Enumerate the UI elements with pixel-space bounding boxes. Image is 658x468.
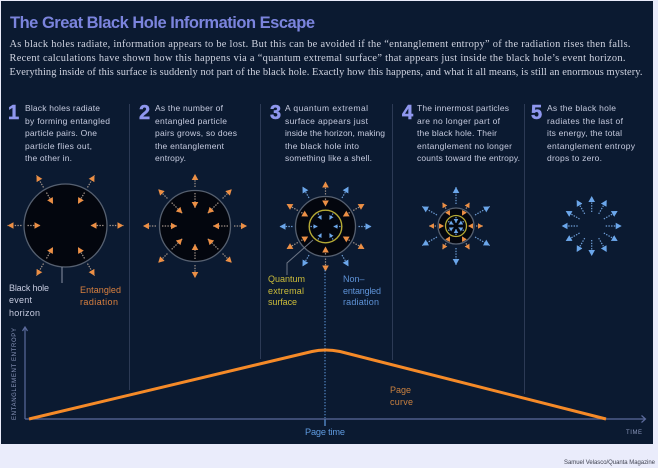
intro text <box>10 39 642 78</box>
step 2 <box>139 102 237 163</box>
step 1 <box>8 102 110 163</box>
step 1: Black holes radiate <box>25 103 100 113</box>
label: non-entangled radiation: radiation <box>343 297 379 307</box>
title: The Great Black Hole Information Escape <box>10 14 315 32</box>
label: quantum extremal surface: extremal <box>268 286 304 296</box>
label: quantum extremal surface <box>268 240 313 307</box>
step 5: drops to zero. <box>547 153 602 163</box>
step 4: The innermost particles <box>417 103 509 113</box>
black hole 1 <box>8 175 124 276</box>
label: black hole event horizon: event <box>9 295 32 305</box>
black hole 2 <box>143 174 247 278</box>
step 1: the other in. <box>25 153 72 163</box>
step 5: 5 <box>531 102 542 124</box>
step 4: entanglement no longer <box>417 141 512 151</box>
step 3: A quantum extremal <box>285 103 368 113</box>
black hole 4 <box>422 187 490 265</box>
step 5: radiates the last of <box>547 116 624 126</box>
label: quantum extremal surface: surface <box>268 297 297 307</box>
x axis label: TIME <box>626 430 642 436</box>
step 3: the black hole into <box>285 141 359 151</box>
step 4: 4 <box>402 102 414 124</box>
step 3: 3 <box>270 102 281 124</box>
step 3: inside the horizon, making <box>285 128 385 138</box>
step 5 <box>531 102 636 163</box>
label: non-entangled radiation: entangled <box>343 286 381 296</box>
label: page curve <box>390 385 413 407</box>
label: page curve: curve <box>390 397 413 407</box>
step 4: are no longer part of <box>417 116 501 126</box>
intro text: As black holes radiate, information appears to be lost. But this can be avoided if the “entanglement entropy” of the radiation rises then falls. <box>10 39 630 50</box>
label: entangled radiation: radiation <box>80 297 118 307</box>
step 2: pairs grows, so does <box>155 128 237 138</box>
step 2: As the number of <box>155 103 224 113</box>
radiation burst 5 <box>562 196 622 256</box>
label: entangled radiation: Entangled <box>80 285 121 295</box>
intro text: Everything inside of this surface is suddenly not part of the black hole. Exactly how this happens, and what it all means, is still an enormous mystery. <box>10 67 642 78</box>
label: quantum extremal surface: Quantum <box>268 274 305 284</box>
step 2: entropy. <box>155 153 186 163</box>
label: non-entangled radiation: Non– <box>343 274 365 284</box>
label: black hole event horizon: horizon <box>9 308 40 318</box>
step 4: the black hole. Their <box>417 128 497 138</box>
intro text: Recent calculations have shown how this happens via a “quantum extremal surface” that appears just inside the black hole’s event horizon. <box>10 53 626 64</box>
step 4 <box>402 102 520 163</box>
y axis label: ENTANGLEMENT ENTROPY <box>12 328 18 420</box>
label: black hole event horizon <box>9 267 62 318</box>
step 1: particle pairs. One <box>25 128 97 138</box>
step 2: entangled particle <box>155 116 227 126</box>
label: non-entangled radiation <box>343 274 381 307</box>
label: entangled radiation <box>80 285 121 307</box>
step 4: counts toward the entropy. <box>417 153 520 163</box>
axes <box>22 327 646 422</box>
step 5: entanglement entropy <box>547 141 636 151</box>
step 3: something like a shell. <box>285 153 372 163</box>
step 3 <box>270 102 385 163</box>
step 3: surface appears just <box>285 116 369 126</box>
column dividers <box>130 104 524 394</box>
black hole 3 with quantum extremal surface <box>280 182 372 272</box>
step 2: the entanglement <box>155 141 225 151</box>
step 2: 2 <box>139 102 150 124</box>
label: page curve: Page <box>390 385 411 395</box>
page curve line <box>29 350 606 419</box>
entropy chart <box>12 327 646 436</box>
step 5: As the black hole <box>547 103 616 113</box>
step 1: by forming entangled <box>25 116 110 126</box>
page time marker: Page time <box>305 427 345 437</box>
credit: Samuel Velasco/Quanta Magazine <box>564 460 656 466</box>
label: black hole event horizon: Black hole <box>9 283 49 293</box>
step 1: 1 <box>8 102 19 124</box>
step 1: particle flies out, <box>25 141 92 151</box>
step 5: its energy, the total <box>547 128 622 138</box>
